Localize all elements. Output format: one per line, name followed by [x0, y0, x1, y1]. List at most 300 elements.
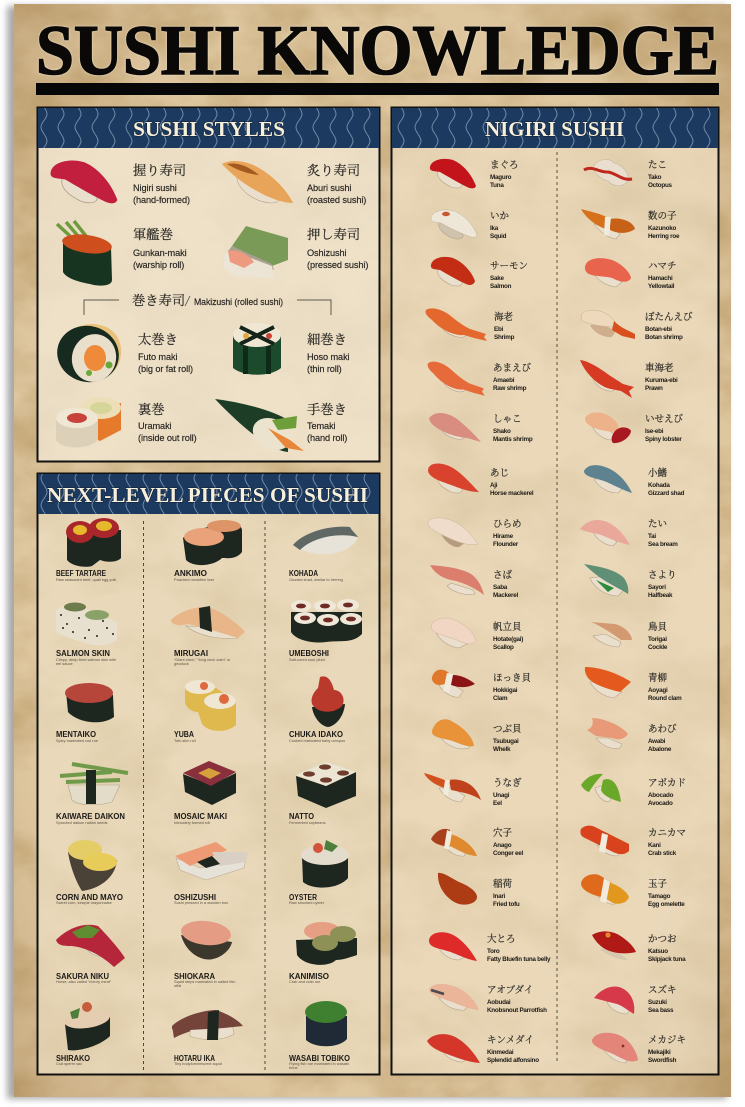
label: hamachi: Hamachi [648, 275, 673, 282]
label: maguro [490, 160, 519, 189]
label: awabi: Abalone [648, 746, 672, 753]
icon: kaiware daikon [60, 764, 128, 805]
label: anago: Anago [493, 842, 512, 849]
header: sushi styles [38, 108, 379, 148]
label: aoyagi: Round clam [648, 695, 682, 702]
label: aburi sushi [307, 163, 366, 205]
label: torigai: 鳥貝 [648, 621, 667, 633]
label: hamachi [648, 261, 677, 290]
label: katsuo: Skipjack tuna [648, 956, 686, 963]
label: tamago: Egg omelette [648, 901, 685, 908]
label: kinmedai: Splendid alfonsino [487, 1057, 539, 1064]
icon: kani [580, 826, 629, 856]
icon: umeboshi [291, 599, 362, 643]
label: tako [648, 160, 673, 189]
label: mosaic maki: Intricately formed roll [174, 820, 210, 825]
label: sayori: Sayori [648, 584, 666, 591]
label: shiokara: SHIOKARA [174, 972, 215, 981]
makizushi divider: 巻き寿司 [132, 293, 185, 308]
icon: kanimiso [296, 922, 357, 965]
label: amaebi [493, 363, 532, 392]
label: unagi: うなぎ [493, 778, 522, 789]
icon: avocado [581, 774, 621, 802]
label: shako: Shako [493, 428, 511, 435]
label: hoso maki: 細巻き [307, 332, 347, 347]
label: ankimo [174, 569, 215, 582]
label: botan ebi: ぼたんえび [645, 311, 693, 323]
label: mekajiki: Swordfish [648, 1057, 677, 1064]
label: oshizushi: (pressed sushi) [307, 260, 368, 270]
label: saba: さば [493, 569, 512, 581]
label: kohada (nigiri): Gizzard shad [648, 490, 685, 497]
label: aburi sushi: 炙り寿司 [307, 163, 360, 178]
label: awabi [648, 724, 677, 753]
label: yuba [174, 730, 196, 743]
label: shako [493, 414, 533, 443]
label: kohada (nigiri) [648, 467, 685, 497]
icon: katsuo [592, 931, 636, 960]
label: shako: Mantis shrimp [493, 436, 533, 443]
label: hokki: Hokkigai [493, 687, 518, 694]
icon: kohada [584, 465, 632, 493]
icon: hamachi [585, 258, 631, 287]
label: torigai: Torigai [648, 636, 667, 643]
label: ebi: Ebi [494, 326, 504, 333]
label: hokki [493, 673, 531, 702]
label: mekajiki: Mekajiki [648, 1049, 671, 1056]
label: uramaki [138, 401, 197, 443]
icon: ise ebi [585, 412, 631, 443]
label: kohada: KOHADA [289, 569, 318, 578]
label: futo maki [138, 331, 193, 374]
label: oshizushi: Oshizushi [307, 248, 346, 258]
label: tai: たい [648, 519, 667, 530]
label: hirame: Hirame [493, 533, 514, 540]
icon: hoso maki [233, 323, 281, 375]
label: suzuki: Suzuki [648, 999, 667, 1006]
icon: awabi [587, 718, 628, 749]
header: next-level pieces: NEXT-LEVEL PIECES OF SUSHI [47, 483, 368, 507]
label: umeboshi: Salt-cured sour plum [289, 657, 325, 662]
icon: temaki [215, 399, 304, 456]
label: salmon skin: SALMON SKIN [56, 649, 110, 658]
icon: oshizushi [224, 226, 288, 278]
label: sakura niku: Horse, also called “cherry meat” [56, 979, 112, 984]
icon: hirame [428, 518, 478, 547]
label: aji: あじ [490, 468, 509, 479]
icon: oshizushi (next-level) [175, 842, 248, 880]
icon: sakura niku [56, 925, 125, 967]
label: sayori: さより [648, 570, 677, 581]
label: hotate: 帆立貝 [493, 621, 522, 633]
label: avocado: アボカド [648, 778, 686, 789]
icon: unagi [424, 773, 481, 802]
label: mirugai: geoduck [174, 661, 189, 666]
label: kani: カニカマ [648, 828, 686, 839]
icon: hotate [431, 618, 476, 648]
label: toro: Toro [487, 948, 500, 955]
label: mosaic maki: MOSAIC MAKI [174, 812, 227, 821]
label: hoso maki: Hoso maki [307, 352, 350, 362]
label: kani: Crab stick [648, 850, 677, 857]
label: unagi: Unagi [493, 792, 510, 799]
label: ebi [494, 311, 515, 341]
label: kazunoko: 数の子 [648, 210, 677, 222]
icon: yuba [185, 680, 236, 731]
label: tai: Sea bream [648, 541, 678, 548]
label: awabi: Awabi [648, 738, 666, 745]
label: hotaru ika: Tiny bodyluminescent squid [174, 1061, 222, 1066]
icon: corn and mayo [68, 840, 117, 891]
label: sake: Salmon [490, 283, 512, 290]
label: ankimo: Poached monkfish liver [174, 577, 215, 582]
label: sake: サーモン [490, 261, 528, 272]
label: hotate: Scallop [493, 644, 514, 651]
icon: kinmedai [427, 1034, 480, 1063]
label: tai: Tai [648, 533, 656, 540]
label: sayori [648, 570, 677, 599]
label: nigiri sushi: (hand-formed) [133, 195, 190, 205]
label: aoyagi [648, 672, 682, 702]
label: toro: Fatty Bluefin tuna belly [487, 956, 551, 963]
label: katsuo: かつお [648, 934, 677, 945]
label: kohada [289, 569, 343, 582]
label: aji: Aji [490, 482, 498, 489]
label: kinmedai: キンメダイ [487, 1035, 534, 1046]
label: botan ebi: Botan-ebi [645, 326, 672, 333]
label: suzuki [648, 985, 677, 1014]
label: tako: Octopus [648, 182, 673, 189]
label: katsuo [648, 934, 686, 963]
label: unagi: Eel [493, 800, 502, 807]
label: aoyagi: Aoyagi [648, 687, 668, 694]
icon: hokki [432, 670, 475, 697]
icon: sake [431, 257, 475, 286]
label: oshizushi (next-level): OSHIZUSHI [174, 893, 216, 902]
label: shiokara: Squid strips marinated in salted fish [174, 979, 235, 984]
icon: shiokara [180, 918, 232, 960]
label: inari: Fried tofu [493, 901, 520, 908]
label: uramaki: Uramaki [138, 421, 172, 431]
label: amaebi: Amaebi [493, 377, 515, 384]
label: saba: Saba [493, 584, 508, 591]
label: sayori: Halfbeak [648, 592, 673, 599]
label: anago: 穴子 [493, 827, 512, 839]
label: mirugai: “Giant clam,” “long neck clam” or [174, 657, 231, 662]
icon: beef tartare [66, 518, 121, 567]
icon: wasabi tobiko [305, 1001, 347, 1046]
label: avocado [648, 778, 686, 807]
icon: ebi [425, 308, 487, 341]
label: oyster: Raw shucked oyster [289, 900, 325, 905]
label: yuba: YUBA [174, 730, 194, 739]
label: tamago [648, 879, 685, 908]
label: temaki [307, 402, 347, 443]
label: amaebi: Raw shrimp [493, 385, 527, 392]
title rule [36, 83, 719, 95]
label: mirugai [174, 649, 231, 666]
label: kazunoko: Kazunoko [648, 225, 676, 232]
label: kaiware daikon: Sprouted daikon radish seeds [56, 820, 108, 825]
label: mekajiki: メカジキ [648, 1035, 686, 1046]
label: hotate [493, 621, 523, 651]
icon: botan ebi [581, 310, 635, 339]
panel: next-level pieces of sushi [37, 473, 380, 1075]
panel: nigiri sushi [391, 107, 719, 1075]
label: aburi sushi: (roasted sushi) [307, 195, 366, 205]
label: yuba: Tofu skin roll [174, 738, 196, 743]
label: ise ebi: いせえび [645, 414, 684, 425]
label: natto [289, 812, 326, 825]
label: umeboshi: UMEBOSHI [289, 649, 329, 658]
label: futo maki: (big or fat roll) [138, 364, 193, 374]
label: futo maki: Futo maki [138, 352, 177, 362]
label: ika: いか [490, 211, 509, 222]
label: hotate: Hotate(gai) [493, 636, 523, 643]
label: chuka idako: CHUKA IDAKO [289, 730, 343, 739]
label: botan ebi: Botan shrimp [645, 334, 683, 341]
label: avocado: Avocado [648, 800, 673, 807]
label: maguro: Maguro [490, 174, 512, 181]
makizushi divider: Makizushi (rolled sushi) [194, 297, 283, 307]
label: mirugai: MIRUGAI [174, 649, 208, 658]
icon: saba [430, 565, 484, 595]
icon: uramaki [56, 397, 121, 448]
label: natto: NATTO [289, 812, 314, 821]
label: katsuo: Katsuo [648, 948, 668, 955]
label: maguro: まぐろ [490, 160, 519, 171]
label: tsubu: つぶ貝 [493, 724, 522, 735]
icon: aoyagi [585, 667, 631, 698]
icon: gunkan maki [57, 221, 113, 286]
label: anago [493, 827, 524, 857]
label: aji [490, 468, 534, 497]
label: shiokara: offal [174, 983, 181, 988]
makizushi divider [84, 293, 331, 315]
label: mentaiko: Spicy marinated cod roe [56, 738, 98, 743]
icon: nigiri sushi [51, 160, 117, 203]
label: uramaki: (inside out roll) [138, 433, 197, 443]
icon: suzuki [594, 986, 634, 1014]
label: natto: Fermented soybeans [289, 820, 326, 825]
label: unagi [493, 778, 522, 807]
label: saba: Mackerel [493, 592, 518, 599]
icon: kazunoko [581, 209, 635, 239]
label: kinmedai: Kinmedai [487, 1049, 514, 1056]
label: kani [648, 828, 686, 857]
icon: oyster [301, 840, 349, 888]
icon: tai [580, 520, 630, 546]
label: mosaic maki [174, 812, 227, 825]
label: temaki: (hand roll) [307, 433, 347, 443]
label: shirako: SHIRAKO [56, 1054, 90, 1063]
label: hirame [493, 519, 522, 548]
icon: maguro [430, 159, 476, 188]
label: kanimiso: KANIMISO [289, 972, 329, 981]
label: gunkan maki: 軍艦巻 [133, 227, 173, 242]
label: salmon skin: eel sauce [56, 661, 73, 666]
label: hirame: ひらめ [493, 519, 522, 530]
label: hokki: Clam [493, 695, 508, 702]
label: aji: Horse mackerel [490, 490, 534, 497]
icon: torigai [591, 622, 632, 647]
icon: aobudai [429, 984, 479, 1010]
label: salmon skin [56, 649, 116, 666]
icon: salmon skin [56, 602, 117, 645]
label: oshizushi: 押し寿司 [307, 226, 360, 242]
label: uramaki: 裏巻 [138, 401, 165, 417]
icon: tsubu [432, 719, 474, 749]
label: temaki: 手巻き [307, 402, 347, 417]
label: kani: Kani [648, 842, 661, 849]
label: chuka idako [289, 730, 345, 743]
label: suzuki: Sea bass [648, 1007, 674, 1014]
label: tsubu: Whelk [493, 746, 511, 753]
label: kaiware daikon [56, 812, 125, 825]
label: inari: 稲荷 [493, 878, 512, 890]
icon: tamago [581, 874, 629, 904]
label: corn and mayo: Sweet corn, kewpie mayonnaise [56, 900, 112, 905]
icon: mentaiko [65, 683, 114, 722]
icon: aji [428, 464, 479, 493]
label: toro [487, 933, 551, 963]
label: ise ebi: Ise-ebi [645, 428, 664, 435]
icon: inari [438, 873, 477, 905]
icon: aburi sushi [222, 161, 293, 203]
label: aoyagi: 青柳 [648, 672, 668, 684]
label: tamago: Tamago [648, 893, 671, 900]
icon: tako [584, 159, 632, 186]
label: tako: たこ [648, 160, 667, 171]
label: hirame: Flounder [493, 541, 519, 548]
label: mentaiko [56, 730, 98, 743]
label: oshizushi [307, 226, 368, 270]
label: ankimo: ANKIMO [174, 569, 207, 578]
icon: mirugai [171, 606, 245, 638]
label: kuruma ebi [645, 362, 678, 392]
label: kazunoko: Herring roe [648, 233, 680, 240]
label: beef tartare: Raw seasoned beef, quail egg yolk [56, 577, 116, 582]
label: awabi: あわび [648, 724, 677, 735]
label: ise ebi [645, 414, 684, 443]
label: wasabi tobiko: WASABI TOBIKO [289, 1054, 350, 1063]
label: kazunoko [648, 210, 680, 240]
label: aobudai [487, 985, 547, 1014]
label: shirako: Cod sperm sac [56, 1061, 82, 1066]
label: inari: Inari [493, 893, 506, 900]
label: aobudai: Knobsnout Parrotfish [487, 1007, 547, 1014]
label: torigai: Cockle [648, 644, 668, 651]
label: sake: Sake [490, 275, 504, 282]
label: aburi sushi: Aburi sushi [307, 183, 351, 193]
label: beef tartare: BEEF TARTARE [56, 569, 107, 578]
label: torigai [648, 621, 668, 651]
label: sakura niku: SAKURA NIKU [56, 972, 109, 981]
label: tai [648, 519, 678, 548]
label: ika: Squid [490, 233, 507, 240]
label: kohada: Gizzard shad, similar to herring [289, 577, 343, 582]
icon: natto [296, 762, 356, 808]
label: nigiri sushi: Nigiri sushi [133, 183, 177, 193]
label: gunkan maki [133, 227, 187, 270]
label: kanimiso: Crab and crab roe [289, 979, 320, 984]
label: mentaiko: MENTAIKO [56, 730, 96, 739]
icon: kohada [293, 527, 358, 554]
icon: ika [431, 210, 477, 239]
label: ise ebi: Spiny lobster [645, 436, 682, 443]
label: kuruma ebi: Prawn [645, 385, 663, 392]
icon: ankimo [183, 520, 242, 565]
label: aobudai: アオブダイ [487, 985, 533, 996]
label: temaki: Temaki [307, 421, 336, 431]
label: kohada (nigiri): 小鰭 [648, 467, 668, 479]
label: botan ebi [645, 311, 693, 341]
header: nigiri sushi [392, 108, 718, 148]
label: ika: Ika [490, 225, 499, 232]
label: kinmedai [487, 1035, 539, 1064]
label: gunkan maki: Gunkan-maki [133, 248, 187, 258]
icon: hotaru ika [172, 1010, 243, 1040]
label: corn and mayo: CORN AND MAYO [56, 893, 123, 902]
label: oyster [289, 893, 325, 905]
label: sake [490, 261, 528, 290]
label: kuruma ebi: Kuruma-ebi [645, 377, 678, 384]
label: chuka idako: Cooked marinated baby octopus [289, 738, 345, 743]
title: SUSHI KNOWLEDGE [36, 12, 719, 90]
label: tsubu: Tsubugai [493, 738, 519, 745]
label: kaiware daikon: KAIWARE DAIKON [56, 812, 125, 821]
label: gunkan maki: (warship roll) [133, 260, 184, 270]
icon: chuka idako [312, 676, 345, 727]
panel: sushi styles [37, 107, 380, 462]
label: oshizushi (next-level) [174, 893, 228, 905]
icon: anago [431, 829, 477, 856]
icon: futo maki [51, 319, 125, 389]
label: shiokara [174, 972, 235, 988]
label: tamago: 玉子 [648, 879, 668, 890]
label: wasabi tobiko: brine [289, 1065, 298, 1070]
label: maguro: Tuna [490, 182, 504, 189]
label: beef tartare [56, 569, 116, 582]
label: nigiri sushi: 握り寿司 [133, 162, 186, 178]
label: hamachi: Yellowtail [648, 283, 675, 290]
label: hotaru ika: HOTARU IKA [174, 1054, 215, 1063]
label: ebi: 海老 [494, 311, 514, 323]
label: kuruma ebi: 車海老 [645, 362, 674, 374]
label: nigiri sushi [133, 162, 190, 205]
label: hokki: ほっき貝 [493, 673, 531, 684]
label: amaebi: あまえび [493, 363, 532, 374]
label: inari [493, 878, 520, 908]
label: hoso maki: (thin roll) [307, 364, 342, 374]
icon: mekajiki [592, 1033, 638, 1063]
label: wasabi tobiko: Flying fish roe marinated in wasabi [289, 1061, 349, 1066]
label: shako: しゃこ [493, 414, 522, 425]
icon: amaebi [428, 362, 485, 396]
label: saba [493, 569, 518, 599]
label: kohada (nigiri): Kohada [648, 482, 670, 489]
label: hamachi: ハマチ [648, 261, 677, 272]
header: sushi styles: SUSHI STYLES [133, 117, 285, 141]
label: anago: Conger eel [493, 850, 524, 857]
header: nigiri sushi: NIGIRI SUSHI [485, 117, 624, 141]
label: ika [490, 211, 509, 240]
label: mekajiki [648, 1035, 686, 1064]
header: next-level pieces [38, 474, 379, 514]
label: tsubu [493, 724, 522, 753]
label: futo maki: 太巻き [138, 331, 178, 347]
label: toro: 大とろ [487, 933, 516, 945]
